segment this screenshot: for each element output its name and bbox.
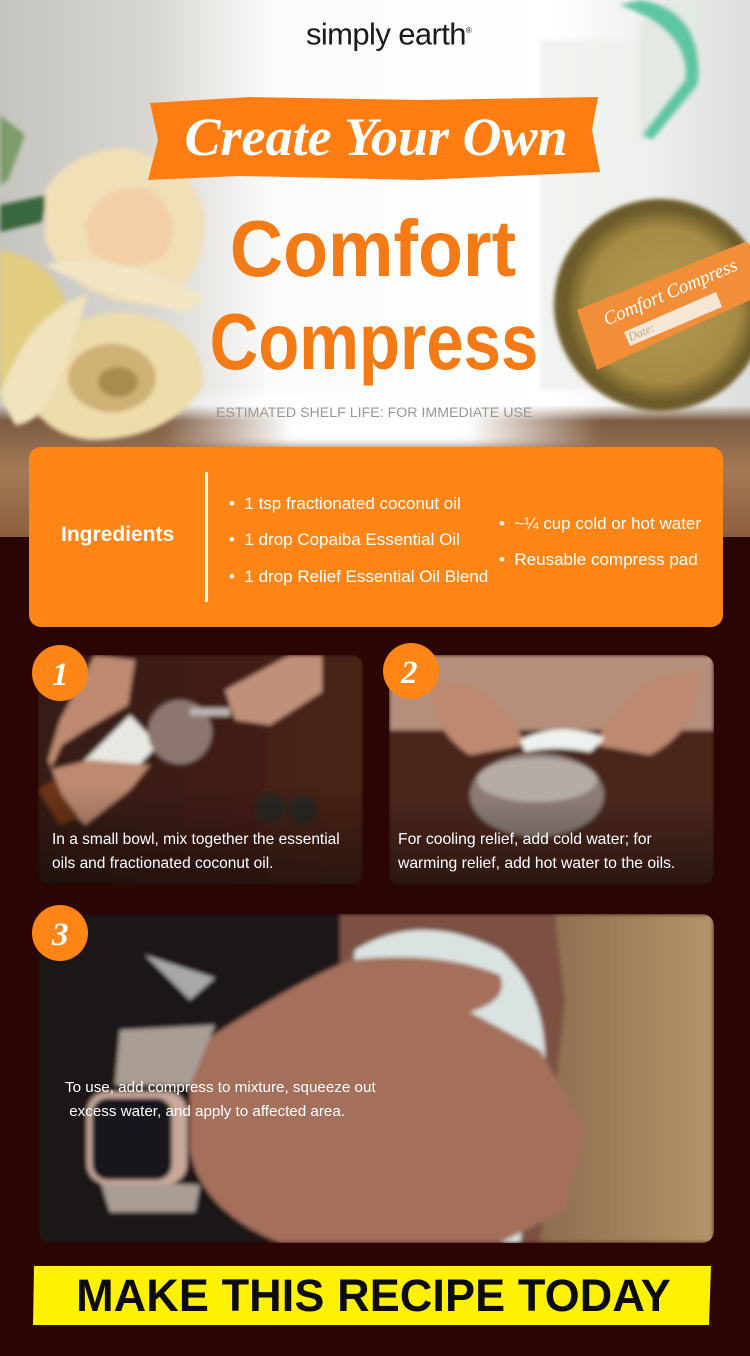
step 1 photo (38, 655, 363, 885)
lid date text: Date: (626, 320, 657, 344)
call to action: MAKE THIS RECIPE TODAY (76, 1270, 671, 1321)
step 2 text (398, 831, 675, 872)
number badges (32, 643, 439, 961)
step 3 photo (38, 914, 714, 1243)
ingredients list left: • 1 drop Copaiba Essential Oil (229, 530, 460, 549)
step 1 text: In a small bowl, mix together the essential (52, 831, 340, 848)
step 1 text (52, 831, 340, 872)
logo: simply earth® (306, 16, 471, 51)
ingredients list right: • Reusable compress pad (499, 550, 698, 569)
step 1 text: oils and fractionated coconut oil. (52, 855, 273, 872)
badge number 1: 1 (52, 657, 68, 693)
ingredients list right (499, 514, 701, 569)
title: Comfort: Comfort (230, 204, 516, 293)
step 3 text: To use, add compress to mixture, squeeze out (65, 1079, 376, 1096)
step 2 text: For cooling relief, add cold water; for (398, 831, 652, 848)
step 3 text (65, 1079, 376, 1120)
title script: Create Your Own (184, 107, 568, 167)
ingredients heading: Ingredients (61, 523, 174, 546)
ingredients list right: • ~¼ cup cold or hot water (499, 514, 701, 533)
ingredients list left: • 1 tsp fractionated coconut oil (229, 494, 461, 513)
shelf life: ESTIMATED SHELF LIFE: FOR IMMEDIATE USE (216, 405, 532, 421)
step 3 text: excess water, and apply to affected area. (69, 1103, 345, 1120)
step 2 photo (389, 655, 714, 885)
jar (540, 0, 700, 390)
badge number 2: 2 (401, 655, 418, 691)
roses (0, 115, 205, 440)
ingredients list left: • 1 drop Relief Essential Oil Blend (229, 567, 488, 586)
title brush banner (148, 97, 600, 180)
ingredients list left (229, 494, 488, 586)
title: Compress: Compress (210, 297, 538, 386)
lid label text: Comfort Compress (600, 255, 741, 330)
badge number 3: 3 (52, 917, 68, 953)
ingredients panel (29, 447, 723, 627)
lid with label (554, 199, 750, 411)
step 2 text: warming relief, add hot water to the oils. (398, 855, 675, 872)
bottom yellow banner (33, 1266, 711, 1325)
